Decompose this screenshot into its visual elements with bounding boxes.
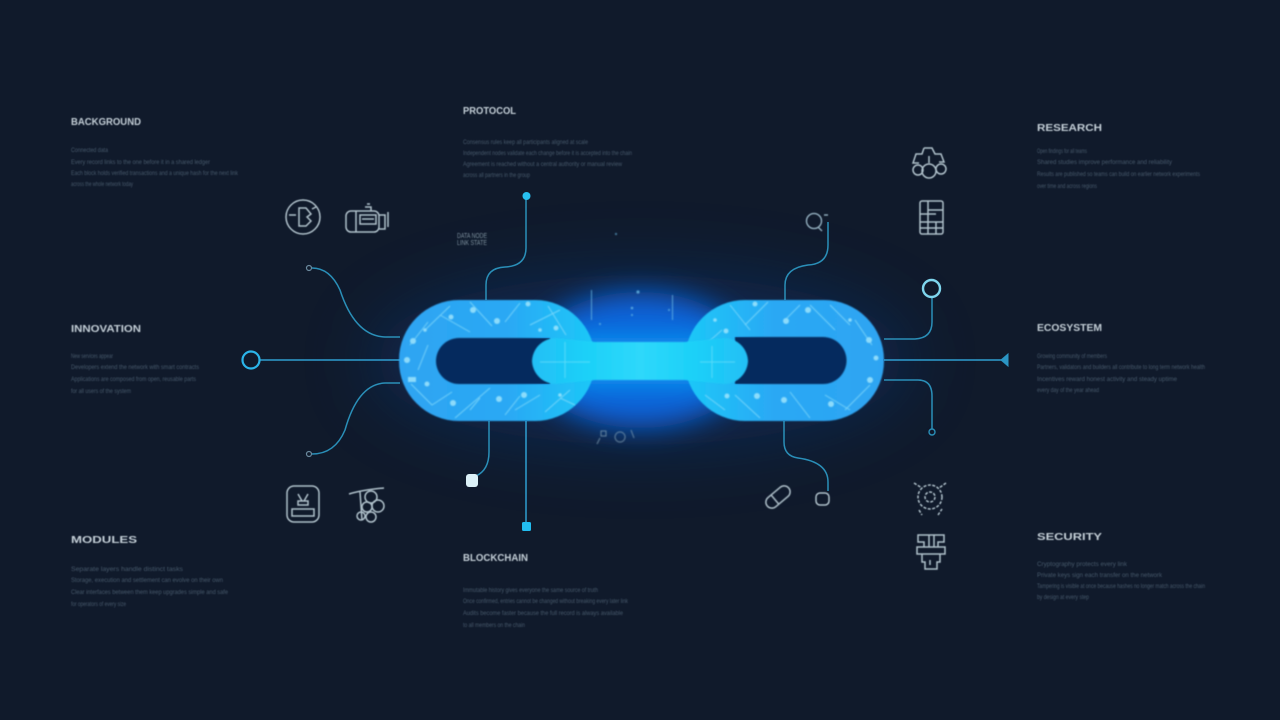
text block: top right: over time and across regions: [1037, 184, 1097, 190]
text block: bottom left: Clear interfaces between them keep upgrades simple and safe: [71, 590, 229, 596]
icon: grid panel: [920, 201, 943, 234]
text block: bottom left: Separate layers handle distinct tasks: [71, 567, 183, 573]
text block: bottom right: Cryptography protects every link: [1037, 562, 1128, 568]
node: white square: [466, 474, 478, 487]
text block: bottom left: Storage, execution and settlement can evolve on their own: [71, 578, 223, 584]
text block: bottom right: Private keys sign each transfer on the network: [1037, 573, 1163, 579]
text block: middle right: every day of the year ahead: [1037, 388, 1099, 394]
icon: machine: [346, 204, 388, 232]
text block: top centre: [463, 106, 632, 179]
connector lines: [258, 198, 1003, 522]
node: top centre dot: [522, 192, 530, 200]
text block: bottom right: SECURITY: [1037, 532, 1102, 543]
text block: middle right: Incentives reward honest activity and steady uptime: [1037, 377, 1178, 383]
text block: top right: [1037, 123, 1200, 190]
text block: middle right: [1037, 323, 1205, 394]
icon: rounded square: [816, 493, 829, 505]
text block: top left: Every record links to the one before it in a shared ledger: [71, 160, 210, 166]
text block: bottom right: [1037, 532, 1205, 601]
icon: grape cluster: [349, 488, 384, 522]
text block: bottom centre: Once confirmed, entries cannot be changed without breaking every later link: [463, 599, 629, 605]
small label near link: DATA NODE: [457, 233, 487, 240]
text block: top centre: PROTOCOL: [463, 106, 516, 117]
icon: badge: [287, 486, 319, 522]
text block: bottom centre: Audits become faster because the full record is always available: [463, 611, 624, 617]
node: left small circle lower: [306, 452, 312, 456]
text block: bottom centre: Immutable history gives everyone the same source of truth: [463, 588, 598, 594]
text block: middle right: ECOSYSTEM: [1037, 323, 1102, 334]
text block: bottom left: MODULES: [71, 535, 137, 546]
text block: top left: across the whole network today: [71, 182, 133, 188]
right link circuit details: [705, 302, 878, 418]
node: left small circle upper: [306, 266, 312, 270]
node: left ring: [242, 352, 260, 368]
icon: plug: [917, 535, 945, 569]
text block: middle left: INNOVATION: [71, 324, 141, 335]
node: right ring: [923, 280, 940, 297]
text block: bottom centre: BLOCKCHAIN: [463, 553, 528, 564]
text block: middle right: Partners, validators and builders all contribute to long term network health: [1037, 365, 1205, 371]
text block: middle left: Developers extend the network with smart contracts: [71, 365, 199, 371]
centre connecting link: [532, 338, 748, 384]
text block: bottom right: by design at every step: [1037, 595, 1090, 601]
text block: middle left: New services appear: [71, 354, 113, 360]
text block: middle right: Growing community of members: [1037, 354, 1107, 360]
icon: gear circle: [286, 200, 320, 234]
text block: top centre: Independent nodes validate each change before it is accepted into the chain: [463, 151, 632, 157]
chain link: left: [399, 300, 595, 421]
small particle icons below link: [597, 430, 634, 444]
text block: bottom right: Tampering is visible at once because hashes no longer match across the chain: [1037, 584, 1205, 590]
text block: top right: Results are published so teams can build on earlier network experiments: [1037, 172, 1200, 178]
node: right small circle: [929, 429, 935, 435]
left link circuit details: [404, 302, 575, 418]
icon: pill: [763, 483, 793, 511]
text block: bottom left: for operators of every size: [71, 602, 127, 608]
central glow: [370, 275, 910, 445]
text block: top left: Each block holds verified transactions and a unique hash for the next link: [71, 171, 239, 177]
text block: top right: Open findings for all teams: [1037, 149, 1087, 155]
floating circuit particles: [591, 233, 673, 325]
text block: bottom left: [71, 535, 229, 608]
node: right arrow marker: [1001, 354, 1008, 366]
node: bottom centre square: [522, 522, 531, 531]
text block: top left: BACKGROUND: [71, 117, 141, 128]
text block: bottom centre: [463, 553, 629, 629]
text block: top left: Connected data: [71, 148, 109, 154]
small label near link: LINK STATE: [457, 240, 487, 247]
icon: Q shape: [806, 214, 828, 231]
text block: top centre: Consensus rules keep all participants aligned at scale: [463, 140, 589, 146]
text block: bottom centre: to all members on the chain: [463, 623, 525, 629]
text block: middle left: for all users of the system: [71, 389, 131, 395]
chain link: right: [685, 300, 884, 421]
text block: top right: Shared studies improve performance and reliability: [1037, 160, 1172, 166]
icon: gear face: [914, 483, 946, 515]
text block: middle left: Applications are composed from open, reusable parts: [71, 377, 196, 383]
text block: top centre: across all partners in the group: [463, 173, 531, 179]
small label near link: [457, 233, 487, 247]
text block: top centre: Agreement is reached without a central authority or manual review: [463, 162, 623, 168]
text block: top right: RESEARCH: [1037, 123, 1102, 134]
icon: cluster top right: [913, 148, 946, 178]
text block: top left: [71, 117, 239, 188]
text block: middle left: [71, 324, 199, 395]
